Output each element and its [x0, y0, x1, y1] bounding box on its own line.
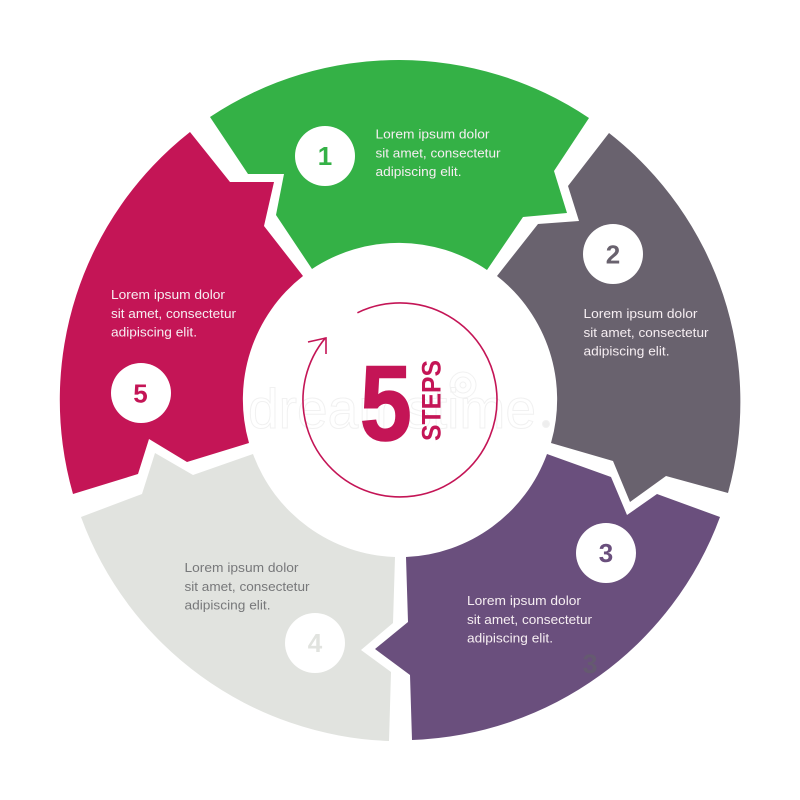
- step 5 text: Lorem ipsum dolor: [111, 288, 225, 302]
- faint stray number 3: 3: [582, 649, 598, 679]
- panel: step 5 (crimson): [60, 132, 303, 494]
- segment: green arrow shape: [210, 60, 589, 270]
- watermark: dreamstime: [248, 377, 536, 440]
- center badge: 5 steps: [303, 303, 497, 497]
- panel: step 3 (purple): [375, 454, 720, 740]
- step 5 number badge: [111, 363, 171, 423]
- step 3 text: sit amet, consectetur: [467, 613, 592, 627]
- step 1 text: [376, 128, 500, 179]
- step 4 text: sit amet, consectetur: [184, 580, 310, 594]
- segment: light grey arrow shape: [81, 453, 395, 741]
- step 5 number badge: 5: [133, 378, 148, 408]
- step 3 text: adipiscing elit.: [467, 632, 553, 646]
- step 2 text: Lorem ipsum dolor: [584, 307, 698, 321]
- step 5 text: adipiscing elit.: [111, 326, 197, 340]
- step 1 number badge: [295, 126, 355, 186]
- segment: crimson arrow shape: [60, 132, 303, 494]
- step 1 text: adipiscing elit.: [376, 165, 462, 179]
- step 4 text: [184, 561, 310, 612]
- step 4 text: Lorem ipsum dolor: [184, 561, 298, 575]
- step 1 number badge: 1: [318, 141, 332, 171]
- step 1 text: Lorem ipsum dolor: [376, 128, 490, 142]
- step 3 text: Lorem ipsum dolor: [467, 594, 581, 608]
- step 3 text: [467, 594, 592, 646]
- step 3 number badge: [576, 523, 636, 583]
- step 5 text: sit amet, consectetur: [111, 307, 236, 321]
- panel: step 2 (grey): [497, 133, 740, 502]
- label: STEPS: STEPS: [416, 360, 446, 441]
- segment: grey arrow shape: [497, 133, 740, 502]
- step 4 number badge: [285, 613, 345, 673]
- circular arrow: [303, 303, 497, 497]
- step 4 number badge: 4: [308, 628, 323, 658]
- step 5 text: [111, 288, 236, 340]
- step 4 text: adipiscing elit.: [184, 598, 270, 612]
- step 3 number badge: 3: [599, 538, 613, 568]
- step 2 text: [584, 307, 708, 358]
- step 1 text: sit amet, consectetur: [376, 146, 500, 160]
- big number 5: 5: [360, 344, 412, 463]
- segment: purple arrow shape: [375, 454, 720, 740]
- panel: step 4 (light grey): [81, 453, 395, 741]
- step 2 number badge: [583, 224, 643, 284]
- panel: step 1 (green): [210, 60, 589, 270]
- step 2 text: sit amet, consectetur: [584, 326, 708, 340]
- step 2 number badge: 2: [606, 240, 620, 270]
- step 2 text: adipiscing elit.: [584, 344, 670, 358]
